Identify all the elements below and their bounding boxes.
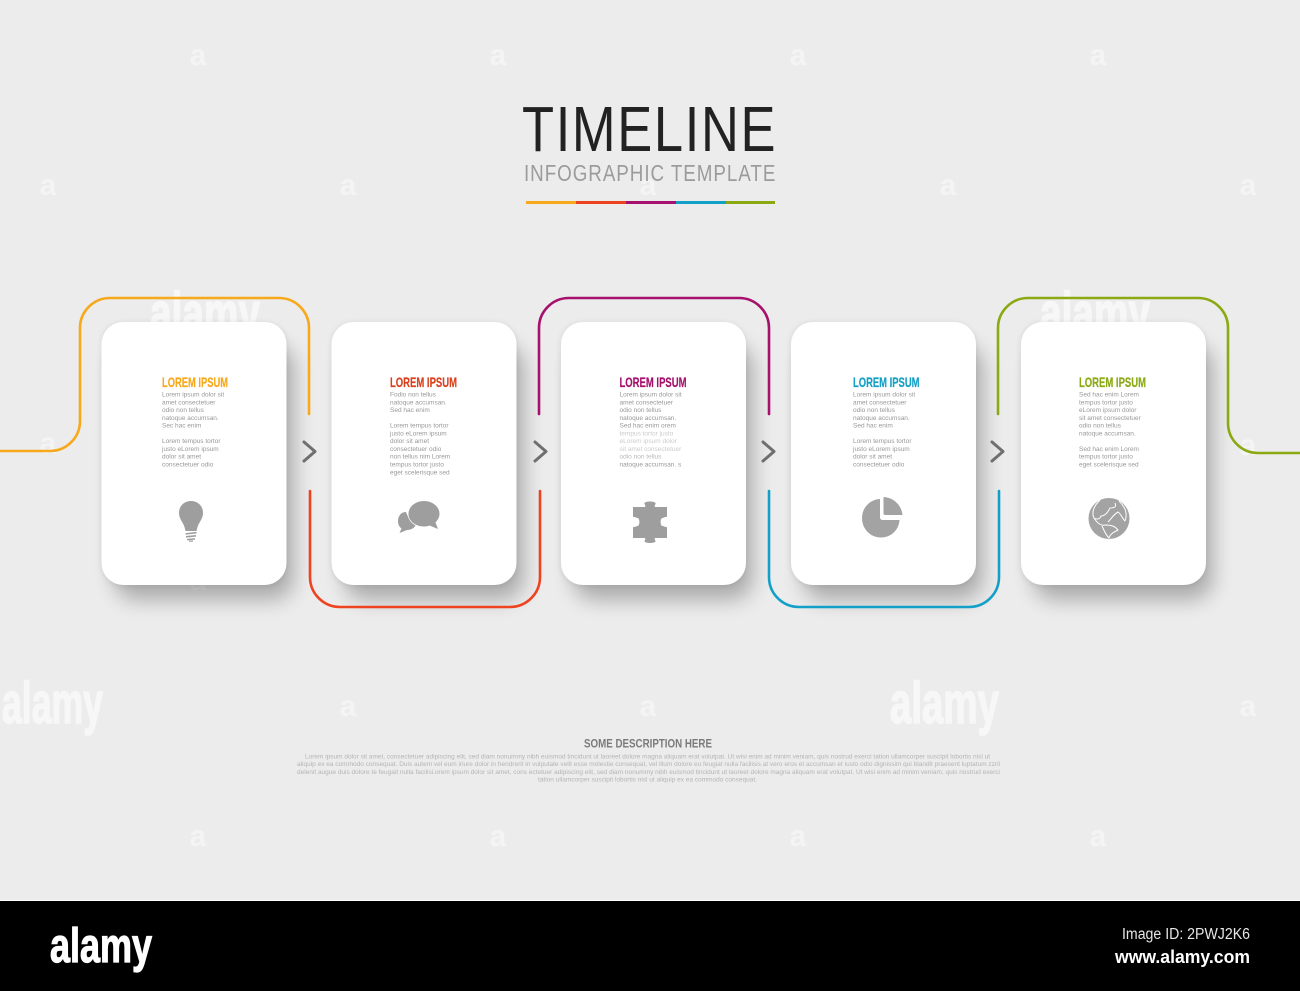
watermark: small repeats: a <box>1240 169 1257 202</box>
description text: delenit augue duis dolore te feugait nulla facilisi.orem ipsum dolor sit amet, cons ectetuer adipiscing elit, sed diam nonummy nibh euismod tincidunt ut laoreet dolore magna aliquam erat volutpat. Ut wisi enim ad minim veniam, quis nostrud exerci <box>297 770 1000 776</box>
text block 2: dolor sit amet <box>390 438 429 445</box>
image id: Image ID: 2PWJ2K6 <box>1122 926 1250 943</box>
watermark: small repeats: a <box>490 820 507 853</box>
icon: puzzle piece <box>633 502 667 543</box>
text block 5: odio non tellus <box>1079 423 1122 430</box>
description text: aliquip ex ea commodo consequat. Duis autem vel eum iriure dolor in hendrerit in vulputate velit esse molestie consequat, vel illum dolore eu feugiat nulla facilisis at vero eros et accumsan et iusto odio dignissim qui blandit praesent luptatum zzril <box>297 762 1000 768</box>
arrow 4 <box>992 442 1003 461</box>
text block 3: eLorem ipsum dolor <box>620 438 678 445</box>
watermark: alamy large repeats: alamy <box>150 281 260 346</box>
text block 1: consectetuer odio <box>162 462 214 469</box>
text block 5: tempus tortor justo <box>1079 399 1133 406</box>
text block 5: natoque accumsan. <box>1079 430 1136 437</box>
text block 4: Sed hac enim <box>853 423 893 430</box>
text block 4: amet consectetuer <box>853 399 907 406</box>
text block 1: Lorem ipsum dolor sit <box>162 392 224 398</box>
line: red step <box>310 491 540 607</box>
text block 3: natoque accumsan. <box>620 415 676 422</box>
heading 5: LOREM IPSUM <box>1079 374 1146 390</box>
panel: card 3 <box>561 322 746 585</box>
icon: light bulb <box>179 501 203 542</box>
text block 1: Lorem tempus tortor <box>162 438 221 445</box>
description text: Lorem ipsum dolor sit amet, consectetuer adipiscing elit, sed diam nonummy nibh euismod tincidunt ut laoreet dolore magna aliquam erat volutpat. Ut wisi enim ad minim veniam, quis nostrud exerci tation ullamcorper suscipit lobortis nisl ut <box>305 754 990 760</box>
line: blue step <box>769 491 999 607</box>
heading 3: LOREM IPSUM <box>620 374 686 390</box>
icon: speech bubbles <box>398 501 440 533</box>
text block 2: Sed hac enim <box>390 407 430 414</box>
text block 3: tempus tortor justo <box>620 430 674 437</box>
website: www.alamy.com <box>1114 947 1250 967</box>
text block 3: odio non tellus <box>620 454 662 461</box>
icon: pie chart <box>862 497 902 538</box>
watermark: small repeats: a <box>640 690 657 723</box>
footer bar <box>0 900 1300 991</box>
watermark: alamy large repeats <box>2 281 1150 736</box>
text block 3: Sed hac enim orem <box>620 423 676 430</box>
watermark: small repeats: a <box>40 169 57 202</box>
watermark: small repeats: a <box>1090 820 1107 853</box>
watermark: small repeats: a <box>340 169 357 202</box>
arrow 2 <box>535 442 546 461</box>
text block 2: justo eLorem ipsum <box>389 430 447 437</box>
watermark: small repeats: a <box>340 690 357 723</box>
panel: card 5 <box>1021 322 1206 585</box>
text block 1: dolor sit amet <box>162 454 201 461</box>
watermark: small repeats: a <box>790 820 807 853</box>
watermark: small repeats: a <box>40 427 57 460</box>
watermark: small repeats: a <box>1240 690 1257 723</box>
text block 5: eLorem ipsum dolor <box>1079 407 1137 414</box>
watermark: small repeats: a <box>190 39 207 72</box>
title colour bar <box>526 201 775 204</box>
text block 5: Sed hac enim Lorem <box>1079 392 1139 398</box>
text block 1: Sec hac enim <box>162 423 201 430</box>
card shadows <box>101 322 1213 600</box>
text block 4: natoque accumsan. <box>853 415 910 422</box>
watermark: alamy large repeats: alamy <box>890 671 999 736</box>
panel: card 1 <box>102 322 286 585</box>
description text <box>297 754 1000 784</box>
line: green step <box>998 298 1300 453</box>
watermark: alamy large repeats: alamy <box>2 671 103 736</box>
watermark: small repeats: a <box>940 169 957 202</box>
text block 5: tempus tortor justo <box>1079 454 1133 461</box>
watermark: small repeats: a <box>490 39 507 72</box>
text block 5: Sed hac enim Lorem <box>1079 446 1139 453</box>
text block 3: Lorem ipsum dolor sit <box>620 392 682 398</box>
text block 5: eget scelerisque sed <box>1079 462 1139 469</box>
icon: globe <box>1088 498 1130 539</box>
text block 3: natoque accumsan. s <box>620 462 682 469</box>
text block 2: Fodio non tellus <box>390 392 437 398</box>
arrow 1 <box>304 442 315 461</box>
text block 2: eget scelerisque sed <box>390 469 450 476</box>
text block 2: tempus tortor justo <box>390 462 444 469</box>
watermark: small repeats <box>40 39 1257 853</box>
panel: card 2 <box>332 322 516 585</box>
text block 2: natoque accumsan. <box>390 399 447 406</box>
text block 4: dolor sit amet <box>853 454 892 461</box>
text block 5: sit amet consectetuer <box>1079 415 1142 422</box>
heading 2: LOREM IPSUM <box>390 374 457 390</box>
watermark: small repeats: a <box>190 820 207 853</box>
text block 3: odio non tellus <box>620 407 662 414</box>
watermark: small repeats: a <box>190 564 207 597</box>
text block 1: odio non tellus <box>162 407 205 414</box>
subtitle: INFOGRAPHIC TEMPLATE <box>524 160 776 187</box>
text block 1: amet consectetuer <box>162 399 216 406</box>
line: yellow step <box>0 298 309 451</box>
text block 2: non tellus nim Lorem <box>390 454 450 461</box>
heading 4: LOREM IPSUM <box>853 374 920 390</box>
text block 2: Lorem tempus tortor <box>390 423 449 430</box>
arrow 3 <box>763 442 774 461</box>
line: purple step <box>539 298 769 414</box>
text block 1: natoque accumsan. <box>162 415 219 422</box>
watermark: small repeats: a <box>640 169 657 202</box>
panel: card 4 <box>791 322 976 585</box>
footer logo: alamy <box>50 920 152 973</box>
title: TIMELINE <box>522 94 777 165</box>
watermark: alamy large repeats: alamy <box>1040 281 1150 346</box>
description heading: SOME DESCRIPTION HERE <box>584 736 712 750</box>
text block 4: odio non tellus <box>853 407 896 414</box>
text block 4: Lorem tempus tortor <box>853 438 912 445</box>
text block 4: Lorem ipsum dolor sit <box>853 392 915 398</box>
description text: tation ullamcorper suscipit lobortis nisl ut aliquip ex ea commodo consequat. <box>538 778 757 784</box>
watermark: small repeats: a <box>790 39 807 72</box>
watermark: small repeats: a <box>1240 429 1257 462</box>
text block 4: consectetuer odio <box>853 462 905 469</box>
heading 1: LOREM IPSUM <box>162 374 228 390</box>
watermark: small repeats: a <box>1090 39 1107 72</box>
text block 4: justo eLorem ipsum <box>852 446 910 453</box>
text block 3: sit amet consectetuer <box>620 446 682 453</box>
text block 2: consectetuer odio <box>390 446 442 453</box>
text block 3: amet consectetuer <box>620 399 674 406</box>
text block 1: justo eLorem ipsum <box>161 446 219 453</box>
